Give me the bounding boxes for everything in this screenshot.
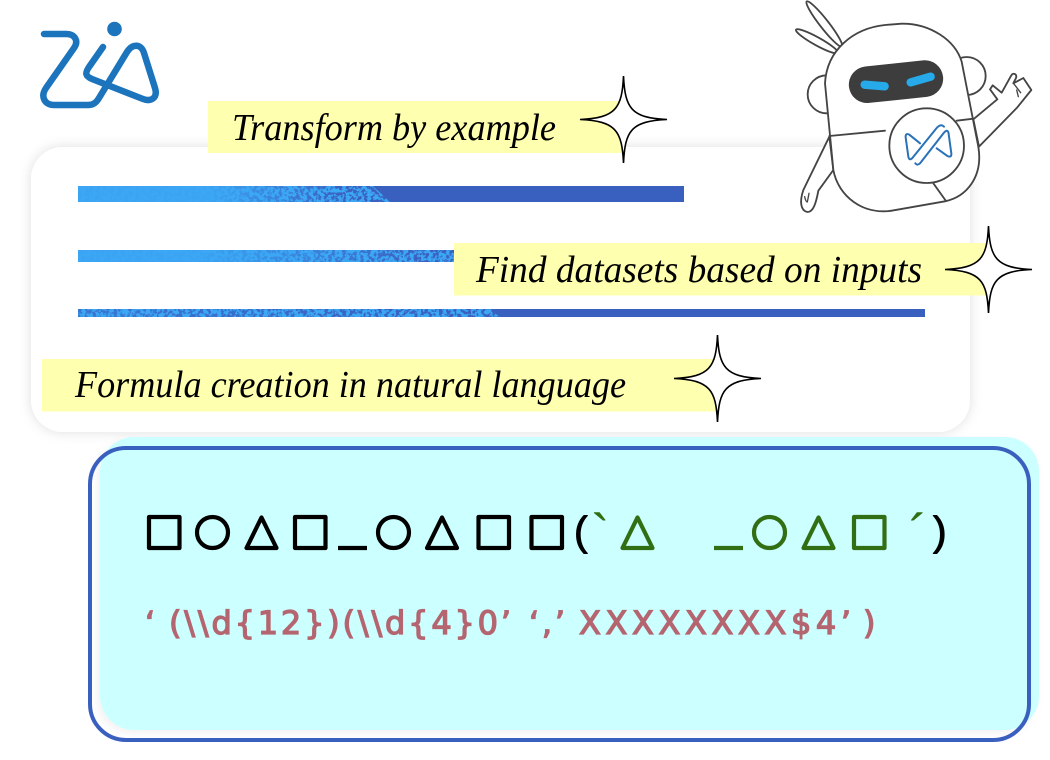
- formula line 2: regex text: ‘: [145, 604, 155, 642]
- formula line 1: symbols: ): [933, 508, 947, 554]
- bar 1: [78, 186, 684, 202]
- panel: code box: [90, 437, 1039, 740]
- bar 2: [78, 250, 460, 262]
- panel: white card: [31, 147, 970, 432]
- formula line 2: regex text: XXXXXXXX$4’: [579, 604, 851, 642]
- callout: transform by example: Transform by example: [232, 107, 556, 149]
- callout: find datasets based on inputs: [454, 226, 1032, 313]
- icon: Zia logo: [43, 22, 156, 105]
- formula line 1: symbols: (: [574, 508, 588, 554]
- callout: transform by example: [208, 76, 667, 163]
- formula line 1: symbols: [149, 502, 947, 565]
- formula line 2: regex text: [145, 604, 875, 642]
- formula line 2: regex text: ‘,’: [529, 604, 565, 642]
- illustration: robot mascot: [794, 0, 1031, 212]
- bar 3: [78, 309, 925, 317]
- formula line 2: regex text: (\\d{12})(\\d{4}0’: [169, 604, 511, 642]
- callout: formula creation in natural language: Formula creation in natural language: [74, 364, 626, 406]
- callout: formula creation in natural language: [42, 335, 761, 422]
- formula line 2: regex text: ): [863, 604, 875, 642]
- callout: find datasets based on inputs: Find datasets based on inputs: [475, 249, 922, 291]
- formula line 1: symbols: ´: [909, 502, 928, 565]
- formula line 1: symbols: `: [591, 502, 610, 565]
